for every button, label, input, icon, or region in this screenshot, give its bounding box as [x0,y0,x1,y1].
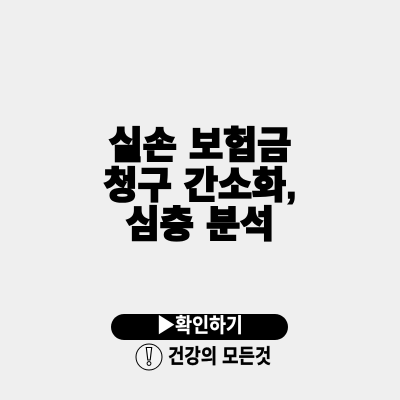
title [103,125,296,245]
brand text: 건강의 모든것 [168,346,271,368]
title: 심층 분석 [126,204,274,245]
button: 확인하기: ▶확인하기 [156,315,243,337]
icon: exclamation circle [136,344,162,370]
button: 확인하기 [111,314,288,340]
title: 청구 간소화, [104,165,296,206]
title: 실손 보험금 [109,125,291,166]
